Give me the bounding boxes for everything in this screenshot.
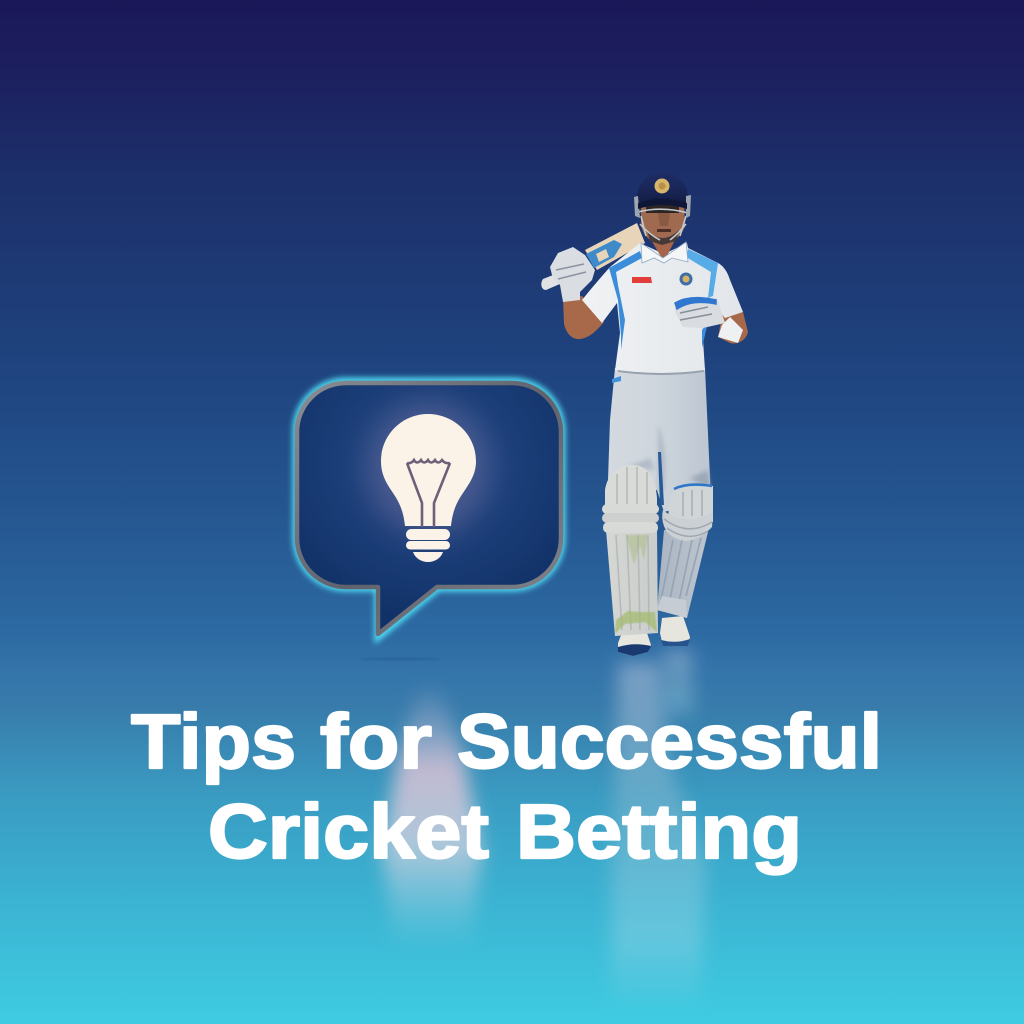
right glove	[675, 298, 725, 328]
waist band	[618, 371, 704, 374]
shirt	[582, 238, 743, 374]
title: Tips	[131, 699, 296, 785]
collar	[641, 242, 688, 263]
trousers	[608, 368, 711, 512]
blue shoulder stripe right	[686, 249, 718, 298]
title: Betting	[516, 789, 802, 875]
right leg pad	[657, 485, 713, 618]
grass stains	[615, 611, 657, 634]
right forearm	[718, 312, 748, 343]
bubble body	[297, 383, 561, 634]
helmet crest	[654, 178, 670, 194]
floor reflections	[360, 650, 706, 1010]
bubble glow	[296, 381, 562, 637]
crest badge	[680, 272, 692, 286]
title: for	[320, 699, 432, 785]
left glove	[550, 247, 595, 302]
head	[634, 173, 691, 245]
waist blue mark	[612, 376, 621, 383]
helmet grille	[638, 209, 688, 240]
right shoe	[660, 616, 690, 646]
title: Cricket	[208, 789, 489, 875]
cricket bat	[541, 223, 645, 290]
left arm	[563, 296, 604, 339]
left leg pad	[602, 465, 659, 636]
neck	[650, 238, 676, 262]
blue shoulder stripe left	[609, 251, 642, 350]
sponsor logo	[632, 277, 652, 283]
title: Successful	[457, 699, 882, 785]
wrist band	[718, 317, 743, 343]
lightbulb icon	[368, 402, 488, 562]
title	[131, 699, 882, 875]
helmet	[637, 173, 688, 206]
left shoe	[618, 627, 651, 656]
leg gap	[658, 452, 664, 505]
speech bubble with lightbulb icon	[296, 381, 562, 637]
trouser shading	[625, 425, 711, 490]
cricket player	[541, 173, 748, 656]
